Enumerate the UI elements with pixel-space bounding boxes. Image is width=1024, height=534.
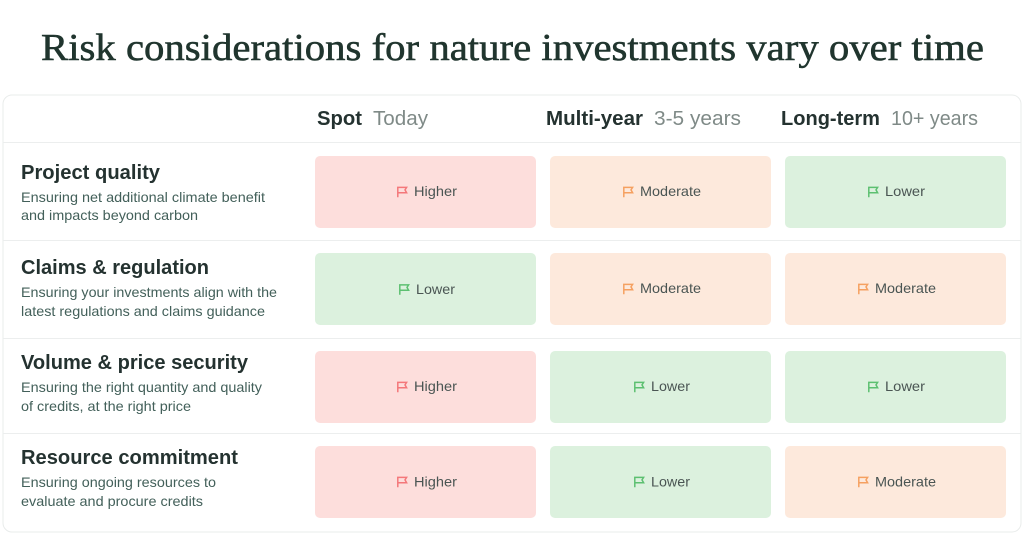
- cell: Resource, Multi-year, Lower: [550, 446, 771, 518]
- cell: Claims, Multi-year, Moderate: Moderate: [640, 280, 701, 296]
- row label: Volume & price security: of credits, at the right price: [21, 398, 191, 414]
- cell: Volume, Long-term, Lower: [785, 351, 1006, 423]
- cell: Volume, Multi-year, Lower: [550, 351, 771, 423]
- row label: Resource commitment: Resource commitment: [21, 447, 238, 469]
- cell: Volume, Spot, Higher: [315, 351, 536, 423]
- cell: Project quality, Spot, Higher: [315, 156, 536, 228]
- column header: Spot: [317, 108, 428, 130]
- cell: Resource, Long-term, Moderate: [785, 446, 1006, 518]
- row label: Project quality: [21, 162, 265, 223]
- title: Risk considerations for nature investments vary over time: [41, 27, 984, 69]
- cell: Project quality, Multi-year, Moderate: [550, 156, 771, 228]
- cell: Project quality, Multi-year, Moderate: Moderate: [640, 183, 701, 199]
- cell: Resource, Spot, Higher: [315, 446, 536, 518]
- row label: Volume & price security: Volume & price security: [21, 352, 249, 374]
- cell: Project quality, Spot, Higher: Higher: [414, 183, 457, 199]
- cell: Resource, Multi-year, Lower: Lower: [651, 474, 690, 490]
- cell: Volume, Multi-year, Lower: Lower: [651, 378, 690, 394]
- column header: Spot: Today: [373, 108, 428, 130]
- row label: Claims & regulation: Ensuring your investments align with the: [21, 284, 277, 300]
- cell: Volume, Long-term, Lower: Lower: [885, 378, 925, 394]
- cell: Resource, Spot, Higher: Higher: [414, 474, 457, 490]
- row label: Claims & regulation: [21, 257, 277, 319]
- cell: Volume, Spot, Higher: Higher: [414, 378, 457, 394]
- cell: Resource, Long-term, Moderate: Moderate: [875, 474, 936, 490]
- row label: Resource commitment: [21, 447, 238, 509]
- column header: Long-term: 10+ years: [891, 108, 978, 130]
- row label: Resource commitment: evaluate and procure credits: [21, 493, 203, 509]
- column header: Multi-year: Multi-year: [546, 108, 643, 130]
- row label: Resource commitment: Ensuring ongoing resources to: [21, 474, 216, 490]
- row label: Claims & regulation: Claims & regulation: [21, 257, 209, 279]
- cell: Claims, Long-term, Moderate: Moderate: [875, 280, 936, 296]
- cell: Claims, Spot, Lower: Lower: [416, 281, 455, 297]
- cell: Project quality, Long-term, Lower: Lower: [885, 183, 925, 199]
- row label: Claims & regulation: latest regulations and claims guidance: [21, 303, 265, 319]
- cell: Project quality, Long-term, Lower: [785, 156, 1006, 228]
- row label: Volume & price security: Ensuring the right quantity and quality: [21, 379, 262, 395]
- column header: Long-term: [781, 108, 978, 130]
- row label: Project quality: Ensuring net additional climate benefit: [21, 189, 265, 205]
- column header: Spot: Spot: [317, 108, 362, 130]
- column header: Multi-year: [546, 108, 741, 130]
- cell: Claims, Long-term, Moderate: [785, 253, 1006, 325]
- row label: Project quality: and impacts beyond carbon: [21, 207, 198, 223]
- cell: Claims, Spot, Lower: [315, 253, 536, 325]
- column header: Multi-year: 3-5 years: [654, 108, 741, 130]
- column header: Long-term: Long-term: [781, 108, 880, 130]
- row label: Volume & price security: [21, 352, 262, 414]
- row label: Project quality: Project quality: [21, 162, 161, 184]
- cell: Claims, Multi-year, Moderate: [550, 253, 771, 325]
